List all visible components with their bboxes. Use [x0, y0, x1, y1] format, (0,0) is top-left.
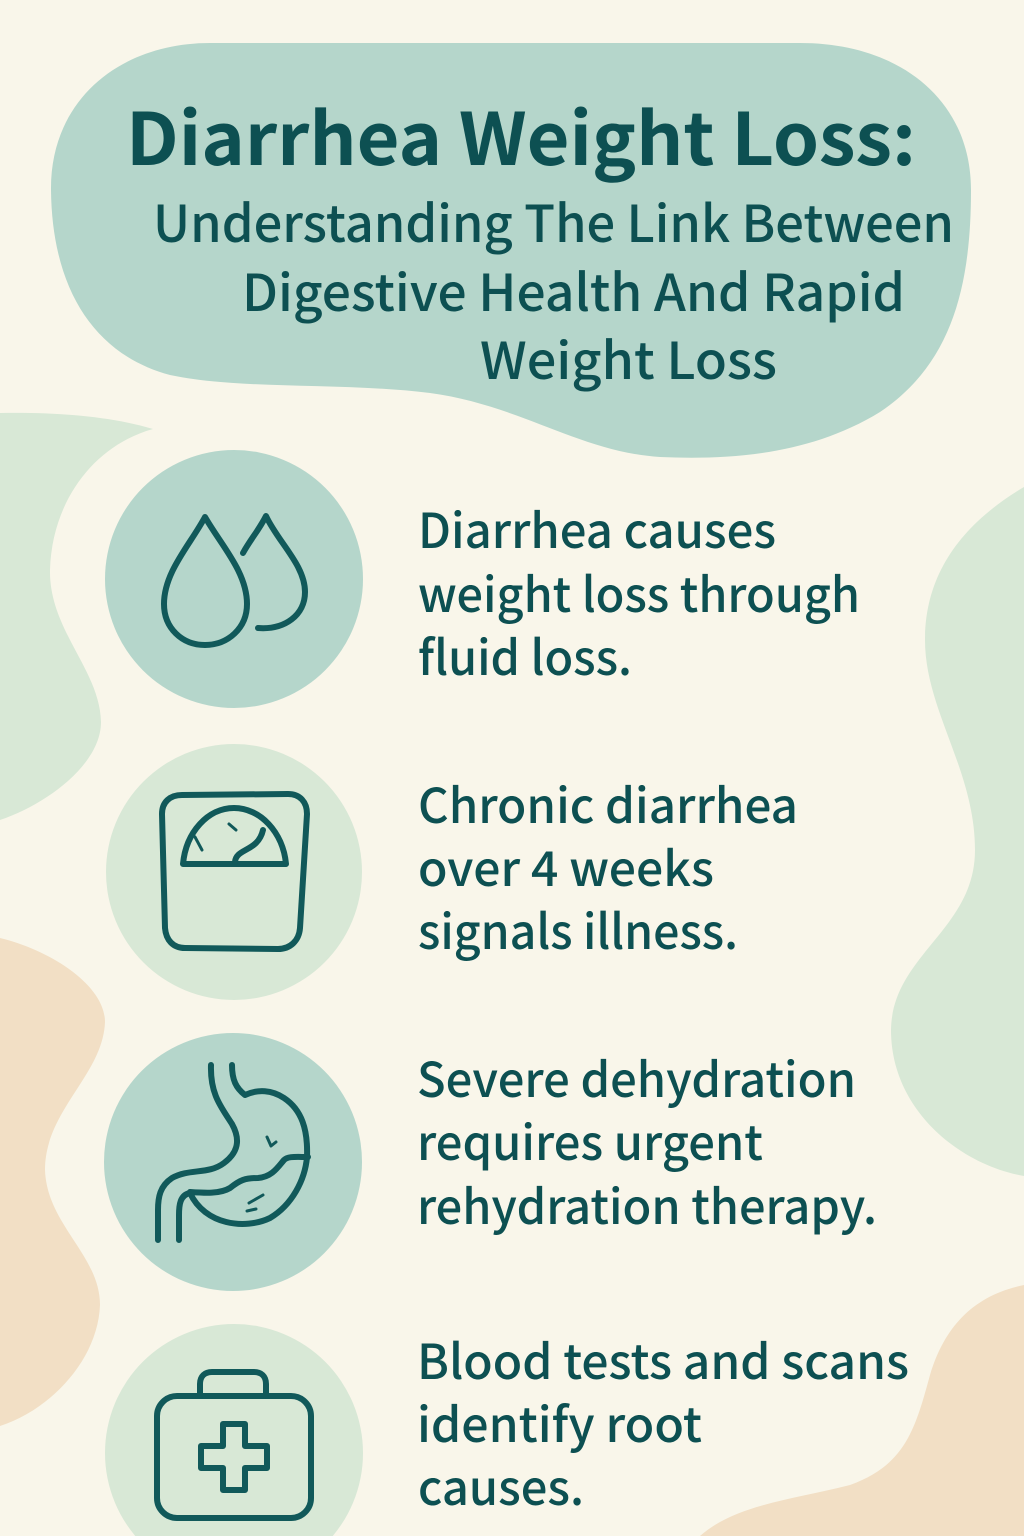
header blob — [51, 43, 971, 458]
title: Diarrhea Weight Loss: — [126, 81, 916, 186]
text 2: Chronic diarrhea — [418, 767, 798, 837]
text 3: Severe dehydration — [417, 1041, 856, 1111]
icon: stomach — [158, 1065, 308, 1240]
blob: bottom right peach — [700, 1285, 1024, 1536]
icon: water drops — [164, 516, 305, 645]
text 4: identify root — [417, 1386, 702, 1456]
subtitle: Understanding The Link Between — [153, 183, 954, 257]
icon: scale — [162, 794, 307, 949]
text 3: rehydration therapy. — [417, 1168, 877, 1238]
item 1: fluid loss — [105, 450, 860, 708]
text 3 — [417, 1041, 877, 1238]
item 4: tests — [105, 1323, 909, 1536]
blob: left peach — [0, 938, 105, 1426]
text 2: over 4 weeks — [418, 830, 714, 900]
text 2: signals illness. — [418, 893, 738, 963]
icon: medical kit — [157, 1372, 311, 1518]
subtitle — [153, 183, 954, 394]
circle 4 — [105, 1324, 363, 1536]
circle 1 — [105, 450, 363, 708]
text 4 — [417, 1323, 909, 1519]
subtitle: Weight Loss — [480, 320, 777, 394]
text 2 — [418, 767, 798, 963]
text 1: Diarrhea causes — [418, 492, 776, 562]
text 1: weight loss through — [418, 556, 860, 626]
blob: right green — [891, 487, 1024, 1176]
blob: left green — [0, 413, 153, 820]
subtitle: Digestive Health And Rapid — [242, 252, 905, 326]
circle 2 — [106, 744, 362, 1000]
text 4: causes. — [418, 1449, 584, 1519]
text 4: Blood tests and scans — [417, 1323, 909, 1393]
circle 3 — [104, 1033, 362, 1291]
text 1: fluid loss. — [418, 619, 632, 689]
item 3: dehydration — [104, 1033, 877, 1291]
header panel — [51, 43, 971, 458]
item 2: chronic — [106, 744, 798, 1000]
text 1 — [418, 492, 860, 689]
text 3: requires urgent — [417, 1104, 763, 1174]
